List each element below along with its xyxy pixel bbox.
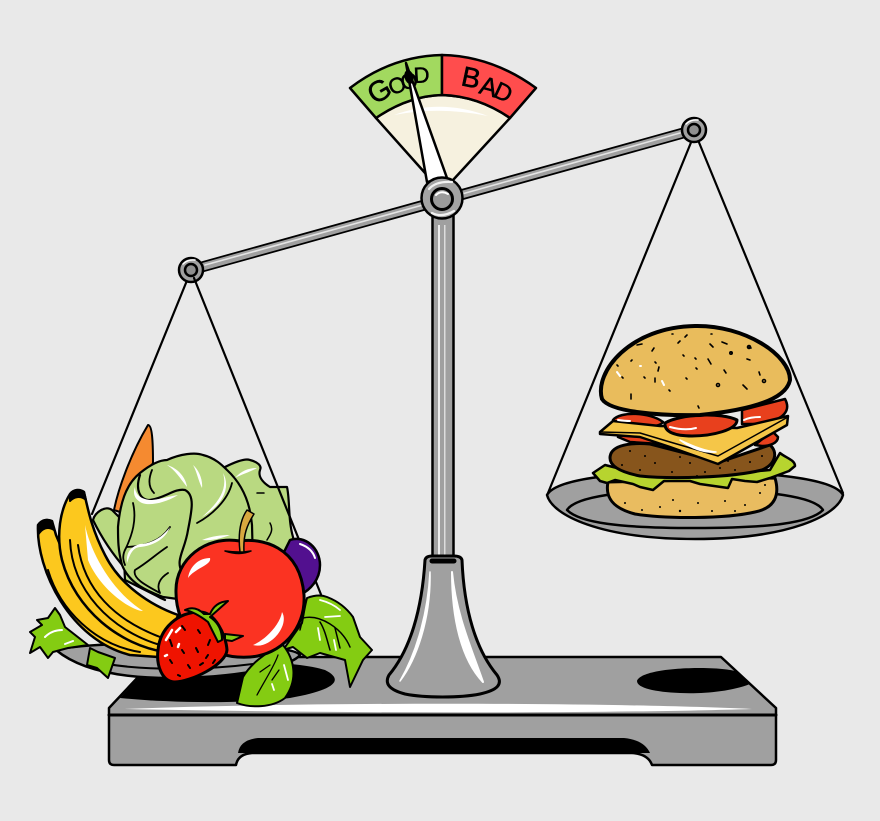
cabbage head bbox=[118, 454, 272, 600]
cabbage white highlights bbox=[127, 465, 257, 563]
patty bbox=[610, 444, 775, 478]
label: GOOD: O bbox=[399, 67, 420, 95]
right pan hole bbox=[637, 668, 750, 693]
top bun bbox=[601, 326, 790, 415]
tomato slice right bbox=[742, 399, 787, 424]
back leaf left bbox=[30, 608, 88, 658]
scale base bbox=[109, 657, 776, 765]
gauge dial bbox=[350, 55, 536, 192]
needle bbox=[403, 63, 447, 182]
left pan bbox=[56, 643, 300, 678]
carrot bbox=[114, 425, 153, 512]
big leaf right bbox=[283, 596, 372, 687]
left pan string, right side bbox=[194, 278, 322, 597]
strawberry bbox=[158, 601, 243, 682]
burger bbox=[593, 326, 795, 518]
right pan strings bbox=[548, 140, 843, 493]
left-side food pile bbox=[30, 278, 372, 706]
right beam pivot bbox=[682, 118, 706, 142]
lettuce bbox=[593, 453, 795, 490]
label: GOOD: G bbox=[362, 72, 398, 111]
post cone foot bbox=[387, 556, 499, 697]
label: BAD: B bbox=[459, 61, 483, 95]
green good zone bbox=[350, 55, 442, 118]
apple stem bbox=[239, 510, 254, 552]
red bad zone bbox=[442, 55, 536, 118]
tomato slice center bbox=[665, 415, 737, 436]
strawberry calyx bbox=[185, 601, 243, 642]
label: BAD: D bbox=[489, 77, 517, 109]
label: BAD: A bbox=[476, 70, 502, 103]
cabbage left leaf bbox=[93, 508, 165, 600]
label: GOOD: O bbox=[385, 71, 410, 100]
left pan hole bbox=[120, 662, 335, 702]
hub bbox=[422, 178, 462, 218]
label: GOOD: D bbox=[413, 62, 430, 88]
small leaf bbox=[87, 648, 115, 678]
bottom bun bbox=[607, 478, 777, 518]
left pan string, left side bbox=[92, 278, 188, 514]
tomato slice left bbox=[613, 414, 663, 429]
balance beam bbox=[191, 130, 694, 270]
front banana bbox=[59, 490, 178, 652]
left beam pivot bbox=[179, 258, 203, 282]
plum bbox=[280, 539, 320, 595]
back banana bbox=[38, 520, 158, 657]
right pan bbox=[547, 472, 843, 539]
cheese bbox=[600, 416, 788, 464]
apple bbox=[176, 540, 304, 657]
center post bbox=[432, 212, 454, 564]
bottom leaf bbox=[237, 645, 293, 706]
sesame seeds bbox=[617, 334, 766, 408]
lower tomato bbox=[755, 431, 778, 446]
cabbage back leaves bbox=[225, 459, 298, 570]
